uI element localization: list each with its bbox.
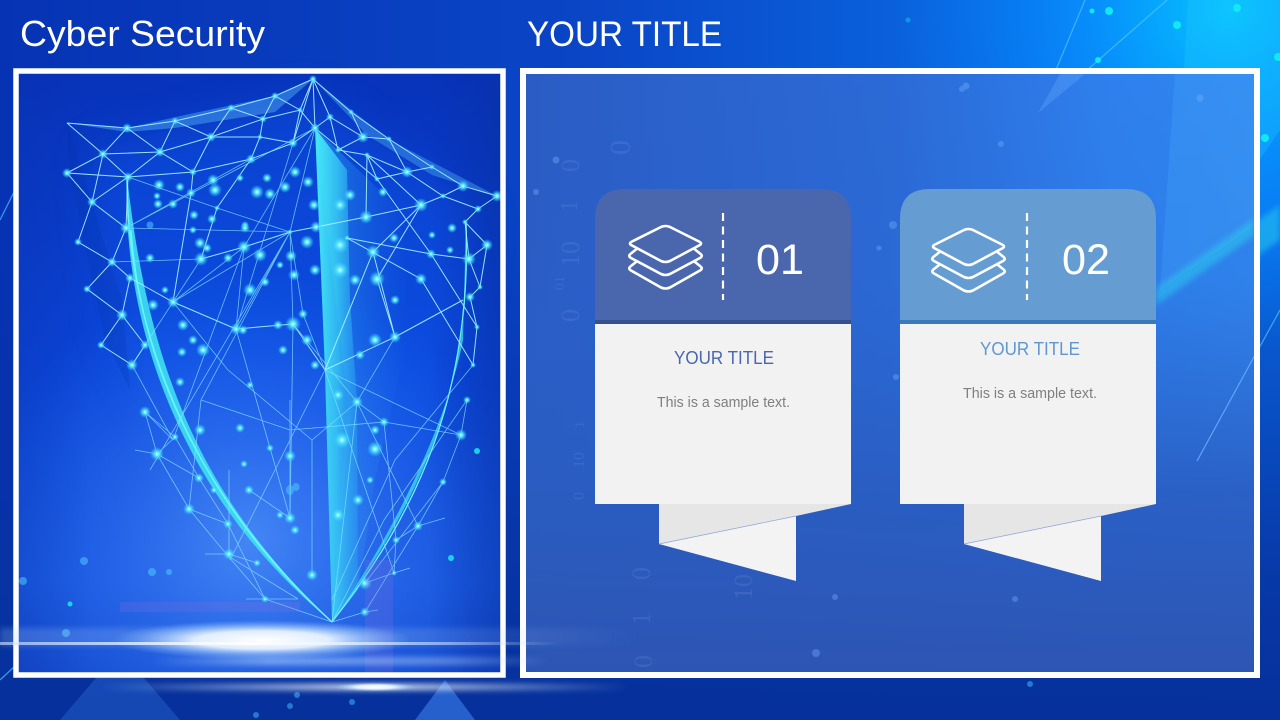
card 2 ribbon bbox=[964, 504, 1156, 581]
binary digits watermark: 0 bbox=[604, 140, 637, 155]
icon: layers bbox=[629, 226, 702, 288]
card 1 ribbon bbox=[659, 504, 851, 581]
network nodes and particles bbox=[62, 75, 503, 617]
panel frame: left bbox=[16, 71, 503, 675]
panel: content background bbox=[526, 74, 1255, 678]
dashed separator bbox=[1026, 213, 1028, 300]
card 2 bbox=[900, 189, 1156, 581]
card 1 title: YOUR TITLE bbox=[674, 347, 774, 368]
card 1 divider bar bbox=[595, 320, 851, 324]
binary digits watermark: 0 bbox=[556, 309, 585, 322]
panel frame: right bbox=[523, 71, 1257, 675]
card 1 header bbox=[595, 189, 851, 320]
icon: layers bbox=[932, 229, 1005, 292]
binary digits watermark: 01 bbox=[553, 276, 568, 290]
card 2 body bbox=[900, 324, 1156, 504]
card 2 text: This is a sample text. bbox=[963, 386, 1097, 402]
shield network bbox=[67, 79, 497, 622]
binary digits watermark: 1 bbox=[627, 612, 656, 625]
panel: shield illustration bbox=[18, 73, 503, 690]
card 1 body bbox=[595, 324, 851, 504]
card 2 divider bar bbox=[900, 320, 1156, 324]
card 2 header bbox=[900, 189, 1156, 320]
binary digits watermark: 1 bbox=[557, 200, 583, 212]
binary digits watermark: 0 bbox=[629, 655, 658, 668]
light flare and streaks bbox=[0, 620, 640, 692]
binary digits watermark: 10 bbox=[729, 574, 758, 600]
title: Cyber Security: Cyber Security bbox=[20, 13, 265, 54]
binary digits watermark: 0 bbox=[627, 567, 656, 580]
binary digits watermark: 0 bbox=[556, 159, 585, 172]
binary digits watermark bbox=[553, 140, 758, 668]
binary digits watermark: 10 bbox=[571, 452, 588, 468]
title: YOUR TITLE: YOUR TITLE bbox=[527, 15, 722, 54]
number 02: 02 bbox=[1062, 236, 1110, 284]
card 1 text: This is a sample text. bbox=[657, 395, 790, 411]
binary digits watermark: 0 bbox=[571, 492, 588, 500]
card 1 bbox=[595, 189, 851, 581]
binary digits watermark: 10 bbox=[556, 241, 585, 267]
number 01: 01 bbox=[756, 236, 804, 284]
card 2 title: YOUR TITLE bbox=[980, 338, 1080, 359]
dashed separator bbox=[722, 213, 724, 300]
binary digits watermark: 1 bbox=[573, 421, 588, 428]
